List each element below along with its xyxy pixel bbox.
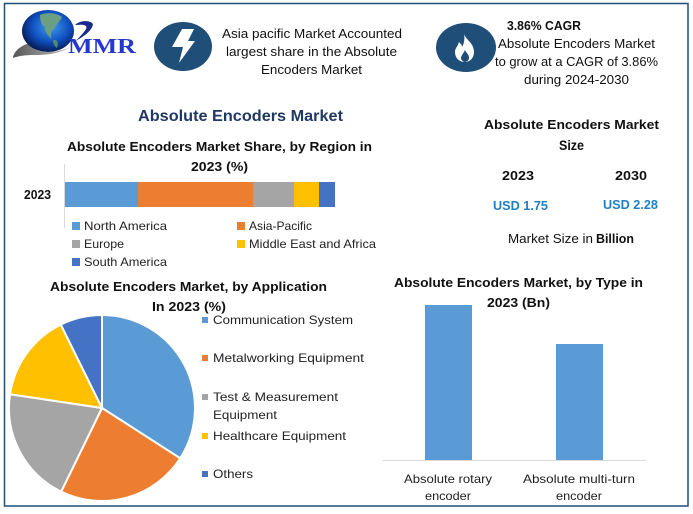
legend: applications: Equipment [213,408,278,422]
callout: CAGR: 3.86% CAGR [507,19,581,33]
stat: 2023 value [493,168,548,213]
logo: MMR globe [13,10,137,58]
stat: 2023 value: 2023 [502,168,534,183]
heading: application chart [50,279,327,314]
callout: regional share: largest share in the Absolute [226,45,397,59]
axis label: multi-turn: Absolute multi-turn [523,472,635,486]
axis label: multi-turn: encoder [556,489,602,503]
legend: regions: Asia-Pacific [249,219,312,233]
panel: market by type [383,275,646,503]
axis label: rotary [404,472,492,503]
panel: market size [484,117,660,246]
callout: regional share: Encoders Market [261,63,363,77]
legend: applications: Healthcare Equipment [213,429,347,443]
logo: MMR globe: MMR [68,34,137,58]
icon: flame [436,23,496,72]
heading: type chart: Absolute Encoders Market, by Type in [394,275,643,290]
axis label: rotary: encoder [425,489,471,503]
panel: market by application [9,279,365,501]
heading: market size: Size [559,138,584,153]
callout: CAGR: Absolute Encoders Market [498,37,656,51]
legend: applications: Metalworking Equipment [213,351,365,365]
callout: regional share [222,27,402,77]
callout: regional share: Asia pacific Market Accounted [222,27,402,41]
stacked bar chart: 2023 [24,188,51,202]
heading: application chart: Absolute Encoders Market, by Application [50,279,327,294]
stat: 2030 value: USD 2.28 [603,197,658,212]
heading: type chart: 2023 (Bn) [487,295,550,310]
axis label: rotary: Absolute rotary [404,472,492,486]
legend: regions: South America [84,255,167,269]
heading: market size [484,117,660,153]
stat: 2023 value: USD 1.75 [493,198,548,213]
note: unit: Billion [596,232,634,246]
note: unit [508,232,634,246]
legend: applications: Others [213,467,253,481]
pie chart [9,315,195,501]
heading: market size: Absolute Encoders Market [484,117,660,132]
legend: applications [202,313,365,481]
heading: region chart: 2023 (%) [191,159,248,174]
legend: applications: Communication System [213,313,353,327]
axis label: multi-turn [523,472,635,503]
heading: region chart: Absolute Encoders Market Share, by Region in [67,139,372,154]
stat: 2030 value [603,168,658,212]
stacked bar chart [24,164,335,228]
bar chart [383,305,646,460]
heading: application chart: In 2023 (%) [152,299,226,314]
panel: market share by region [24,139,376,269]
callout: CAGR [495,19,658,87]
heading: region chart [67,139,372,174]
legend: regions: Europe [84,237,124,251]
callout: CAGR: during 2024-2030 [524,73,629,87]
legend: applications: Test & Measurement [213,390,339,404]
note: unit: Market Size in [508,232,593,246]
stat: 2030 value: 2030 [615,168,647,183]
legend: regions: North America [84,219,167,233]
legend: regions: Middle East and Africa [249,237,376,251]
heading: type chart [394,275,643,310]
legend: regions [72,219,376,269]
title: Absolute Encoders Market [138,108,344,125]
icon: lightning bolt [154,22,212,71]
callout: CAGR: to grow at a CAGR of 3.86% [495,55,658,69]
